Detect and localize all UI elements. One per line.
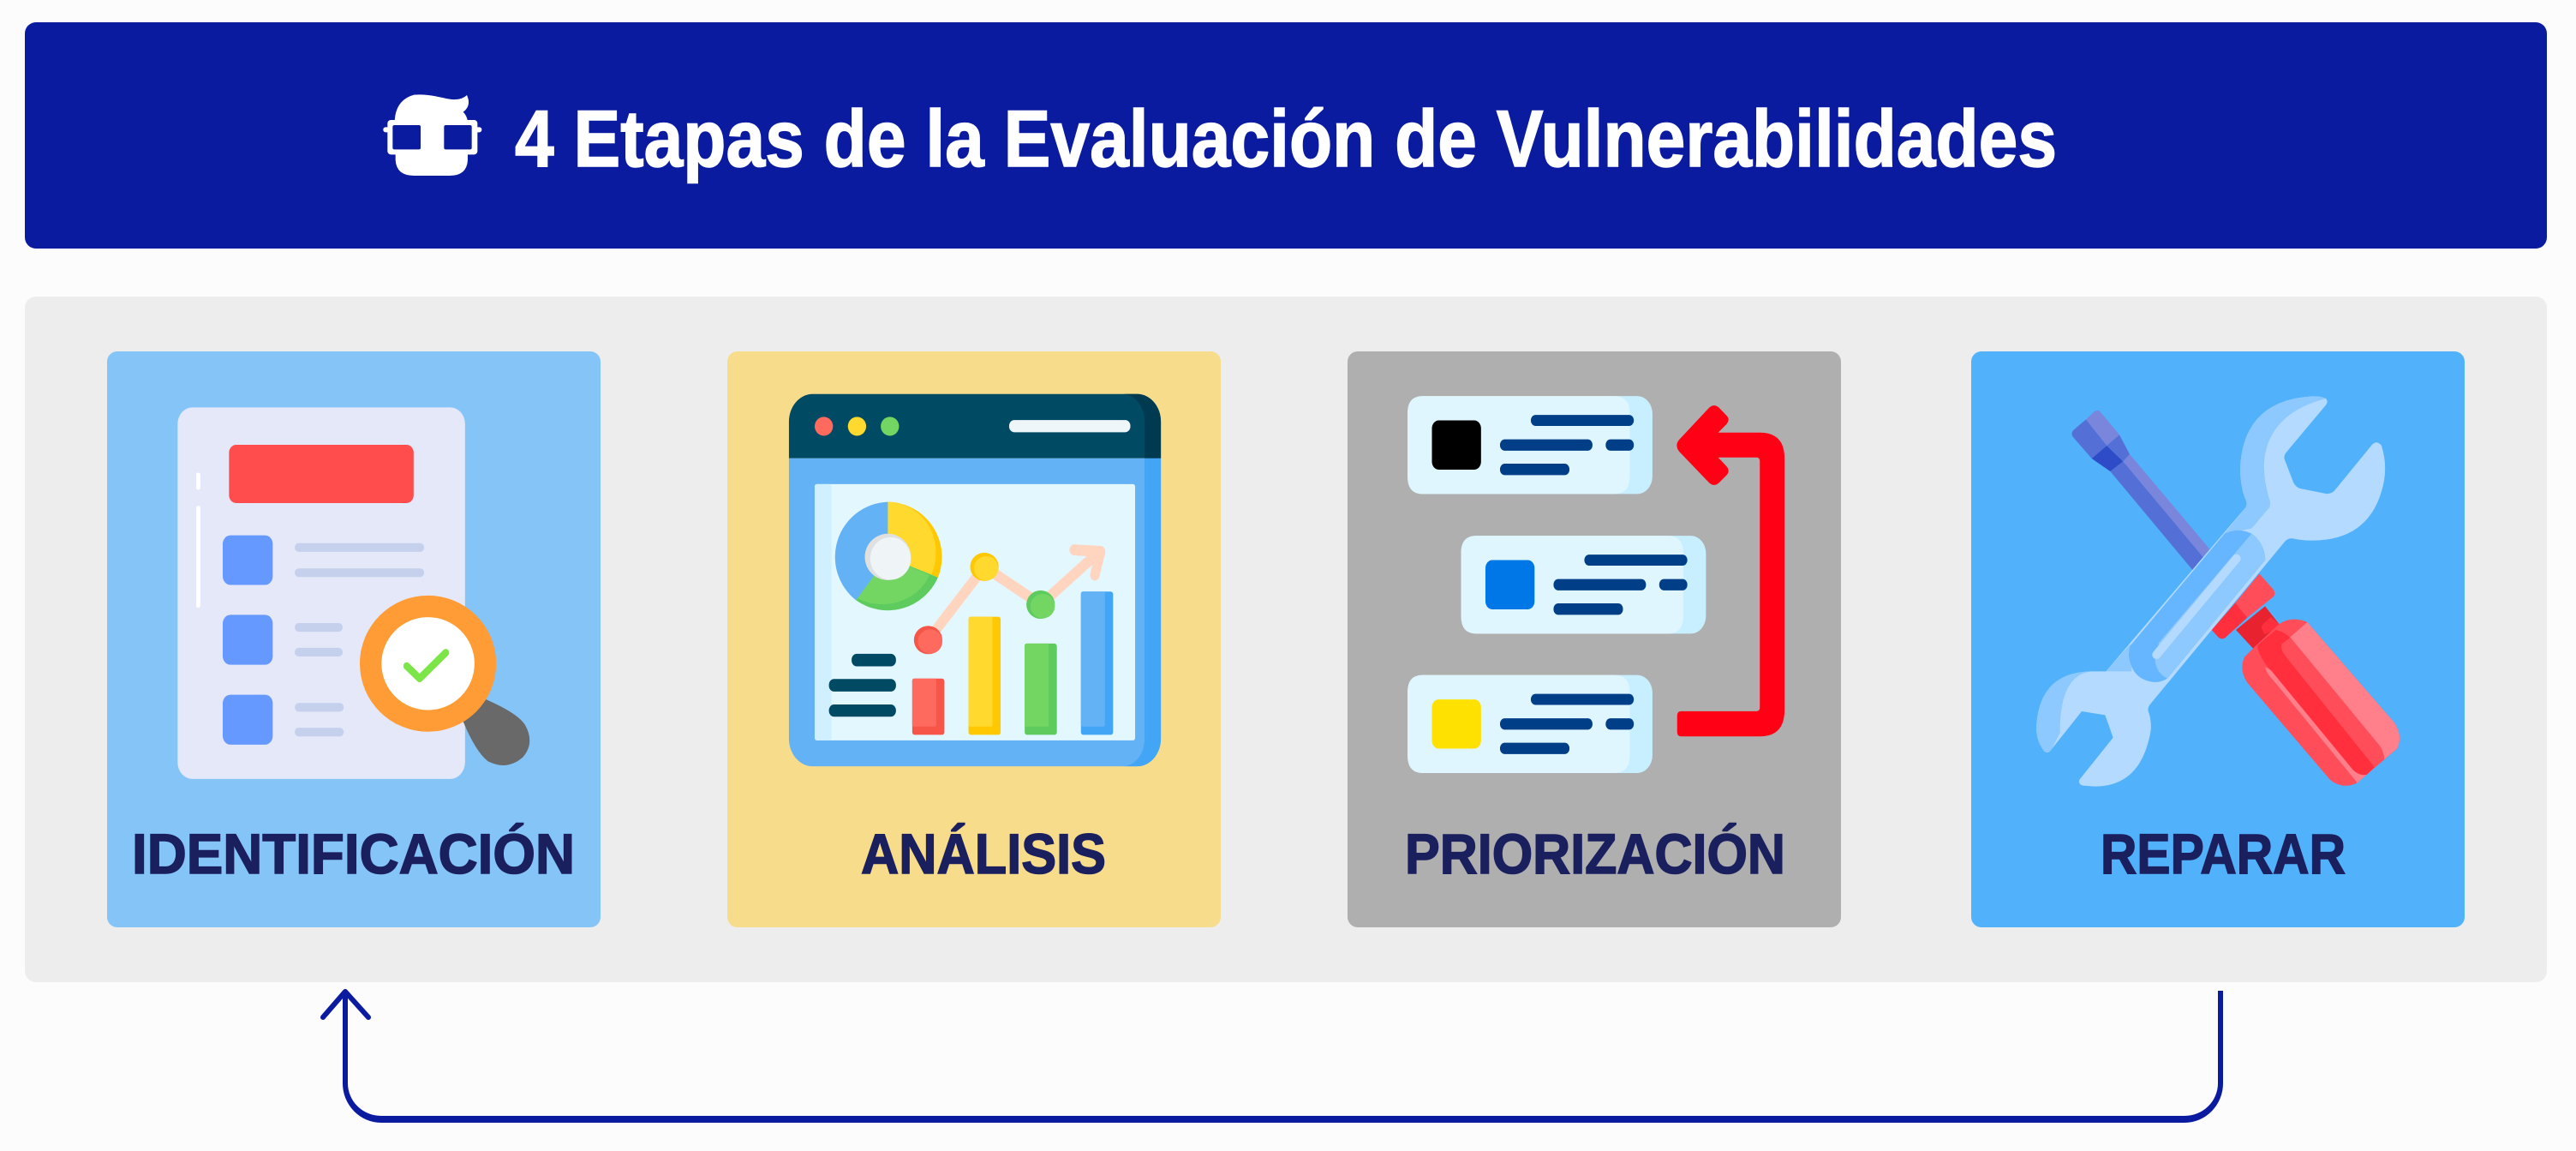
arrow: feedback loop from reparar back to identificación xyxy=(323,991,2223,1123)
wrench shaded jaws xyxy=(2036,396,2326,752)
icon: checklist document with magnifier xyxy=(177,407,529,779)
item card: yellow xyxy=(1408,675,1653,773)
panel: identificación xyxy=(107,351,601,927)
icon: analytics browser window xyxy=(789,394,1161,766)
arrow: red bent xyxy=(1676,405,1784,736)
panel: priorización xyxy=(1348,351,1841,927)
icon: priority list with arrow xyxy=(1408,396,1784,773)
panel: análisis xyxy=(727,351,1221,927)
wrench body xyxy=(2036,396,2385,787)
label: reparar: REPARAR xyxy=(2101,822,2346,885)
screwdriver shaft and tip xyxy=(2071,411,2209,570)
item card: blue xyxy=(1461,536,1706,633)
wrench grip xyxy=(2129,531,2265,682)
screwdriver handle xyxy=(2212,573,2400,786)
header banner xyxy=(25,22,2547,249)
panel: reparar xyxy=(1971,351,2465,927)
label: priorización: PRIORIZACIÓN xyxy=(1405,822,1785,885)
panel: stages background xyxy=(25,297,2547,982)
item card: black xyxy=(1408,396,1653,494)
title: 4 Etapas de la Evaluación de Vulnerabilidades xyxy=(515,93,2057,183)
label: identificación: IDENTIFICACIÓN xyxy=(132,822,575,885)
icon: crossed wrench and screwdriver xyxy=(2036,396,2400,787)
icon: mascot face with glasses xyxy=(383,94,481,176)
label: análisis: ANÁLISIS xyxy=(861,822,1106,885)
